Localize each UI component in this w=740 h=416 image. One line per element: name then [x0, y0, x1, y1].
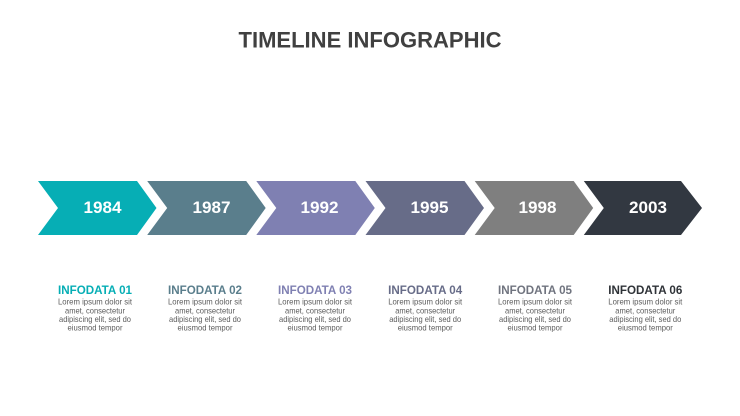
info block 02: amet, consectetur [175, 305, 235, 315]
arrow: 1995 [366, 181, 484, 235]
title: TIMELINE INFOGRAPHIC [238, 28, 502, 52]
info block 06: adipiscing elit, sed do [609, 314, 682, 324]
timeline arrows [38, 181, 702, 235]
info block 01: Lorem ipsum dolor sit [58, 297, 133, 307]
arrow: 1995: 1995 [410, 198, 448, 217]
info block 06: INFODATA 06 [608, 284, 683, 297]
info block 02: eiusmod tempor [178, 323, 233, 333]
info blocks [58, 284, 683, 333]
info block 04: eiusmod tempor [398, 323, 453, 333]
arrow: 1992 [256, 181, 375, 235]
info block 05: adipiscing elit, sed do [499, 314, 571, 324]
info block 04: adipiscing elit, sed do [389, 314, 461, 324]
info block 01: INFODATA 01 [58, 284, 133, 297]
info block 05: INFODATA 05 [498, 284, 573, 297]
arrow: 2003 [584, 181, 702, 235]
info block 04: Lorem ipsum dolor sit [388, 297, 463, 307]
info block 04: INFODATA 04 [388, 284, 463, 297]
arrow: 2003: 2003 [629, 198, 667, 217]
info block 02: INFODATA 02 [168, 284, 242, 297]
info block 04 [388, 284, 463, 333]
arrow: 1998: 1998 [518, 198, 556, 217]
arrow: 1984: 1984 [84, 198, 122, 217]
arrow: 1992: 1992 [300, 198, 338, 217]
info block 02: Lorem ipsum dolor sit [168, 297, 243, 307]
arrow: 1998 [475, 181, 593, 235]
info block 03 [278, 284, 353, 333]
info block 03: Lorem ipsum dolor sit [278, 297, 353, 307]
info block 03: amet, consectetur [285, 305, 345, 315]
info block 06: Lorem ipsum dolor sit [608, 297, 683, 307]
info block 01: eiusmod tempor [68, 323, 123, 333]
info block 01 [58, 284, 133, 333]
info block 05: eiusmod tempor [508, 323, 563, 333]
arrow: 1987 [147, 181, 266, 235]
arrow: 1987: 1987 [192, 198, 230, 217]
info block 05: amet, consectetur [505, 305, 565, 315]
info block 03: INFODATA 03 [278, 284, 353, 297]
info block 05: Lorem ipsum dolor sit [498, 297, 573, 307]
info block 04: amet, consectetur [395, 305, 455, 315]
info block 01: adipiscing elit, sed do [59, 314, 131, 324]
arrow: 1984 [38, 181, 156, 235]
info block 06: amet, consectetur [615, 305, 675, 315]
info block 05 [498, 284, 573, 333]
info block 06 [608, 284, 683, 333]
info block 02: adipiscing elit, sed do [169, 314, 241, 324]
info block 03: eiusmod tempor [288, 323, 343, 333]
info block 03: adipiscing elit, sed do [279, 314, 351, 324]
info block 01: amet, consectetur [65, 305, 125, 315]
info block 02 [168, 284, 243, 333]
info block 06: eiusmod tempor [618, 323, 673, 333]
